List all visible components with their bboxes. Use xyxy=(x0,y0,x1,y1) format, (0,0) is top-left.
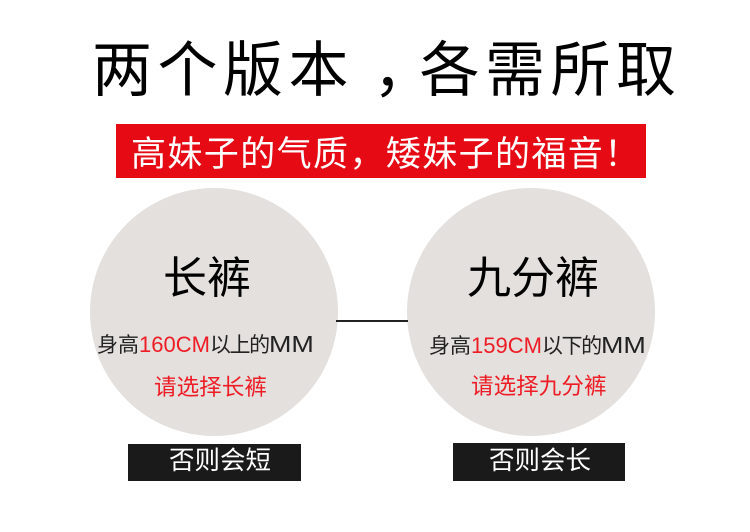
warning box: too short xyxy=(128,444,301,481)
banner text: 高妹子的气质，矮妹子的福音！ xyxy=(131,135,641,174)
height text: long pants: 身高160CM以上的 xyxy=(97,332,269,357)
height text: long pants: MM xyxy=(269,331,314,357)
advice text: long pants: 请选择长裤 xyxy=(154,375,267,400)
height text: cropped pants: 身高159CM以下的 xyxy=(429,333,601,358)
height text: cropped pants: MM xyxy=(601,332,646,358)
heading: long pants: 长裤 xyxy=(163,254,251,303)
connector line xyxy=(336,320,408,322)
panel: cropped pants circle xyxy=(407,188,655,436)
heading: cropped pants: 九分裤 xyxy=(467,254,599,303)
title: 两个版本 ，各需所取 xyxy=(92,37,682,104)
warning text: too short: 否则会短 xyxy=(169,447,271,475)
panel: long pants circle xyxy=(90,188,338,436)
warning text: too long: 否则会长 xyxy=(489,447,591,475)
warning box: too long xyxy=(453,443,625,481)
advice text: cropped pants: 请选择九分裤 xyxy=(471,374,607,399)
red banner xyxy=(116,124,646,178)
